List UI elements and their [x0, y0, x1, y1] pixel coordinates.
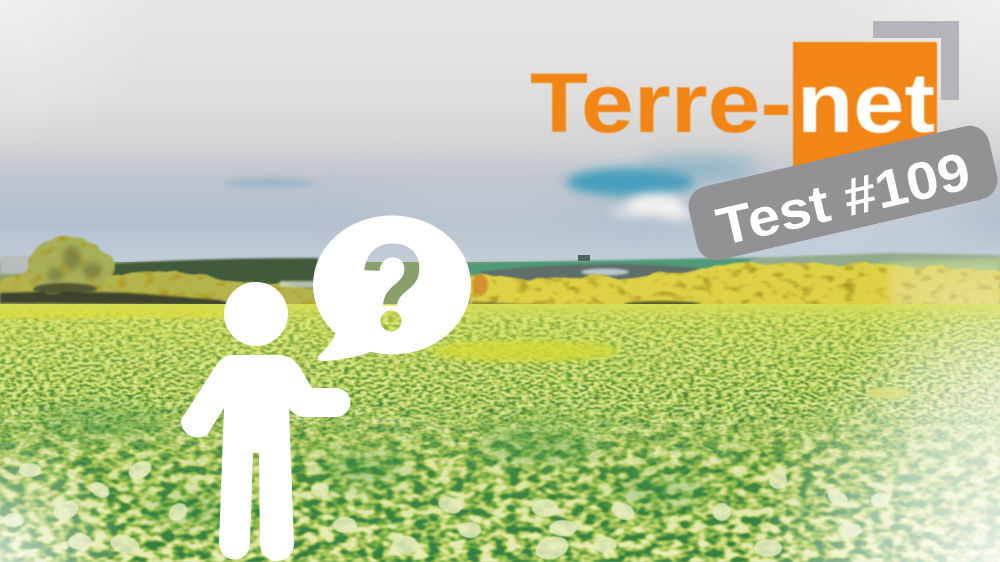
logo: grey corner square [873, 21, 959, 100]
pale leaves foreground [4, 458, 889, 562]
logo: net wordmark: net [797, 56, 935, 150]
hedge right [470, 262, 1000, 311]
cloud: white [610, 194, 693, 221]
logo: orange square [793, 42, 937, 172]
icon: person [181, 282, 350, 561]
cloud: teal opening [566, 159, 760, 196]
icon: speech bubble with question mark [313, 216, 471, 361]
badge: Test #109: Test #109 [711, 142, 976, 257]
logo: Terre- wordmark: Terre- [530, 56, 792, 150]
tree [25, 237, 115, 295]
dark green patches [30, 406, 710, 524]
hedge left [0, 270, 320, 307]
background: crop field [0, 304, 1000, 562]
badge: Test #109 [685, 122, 1000, 264]
background: horizon and hedges [0, 237, 1000, 312]
treeline left [112, 258, 318, 286]
background: sky [0, 0, 1000, 270]
village [480, 264, 710, 284]
